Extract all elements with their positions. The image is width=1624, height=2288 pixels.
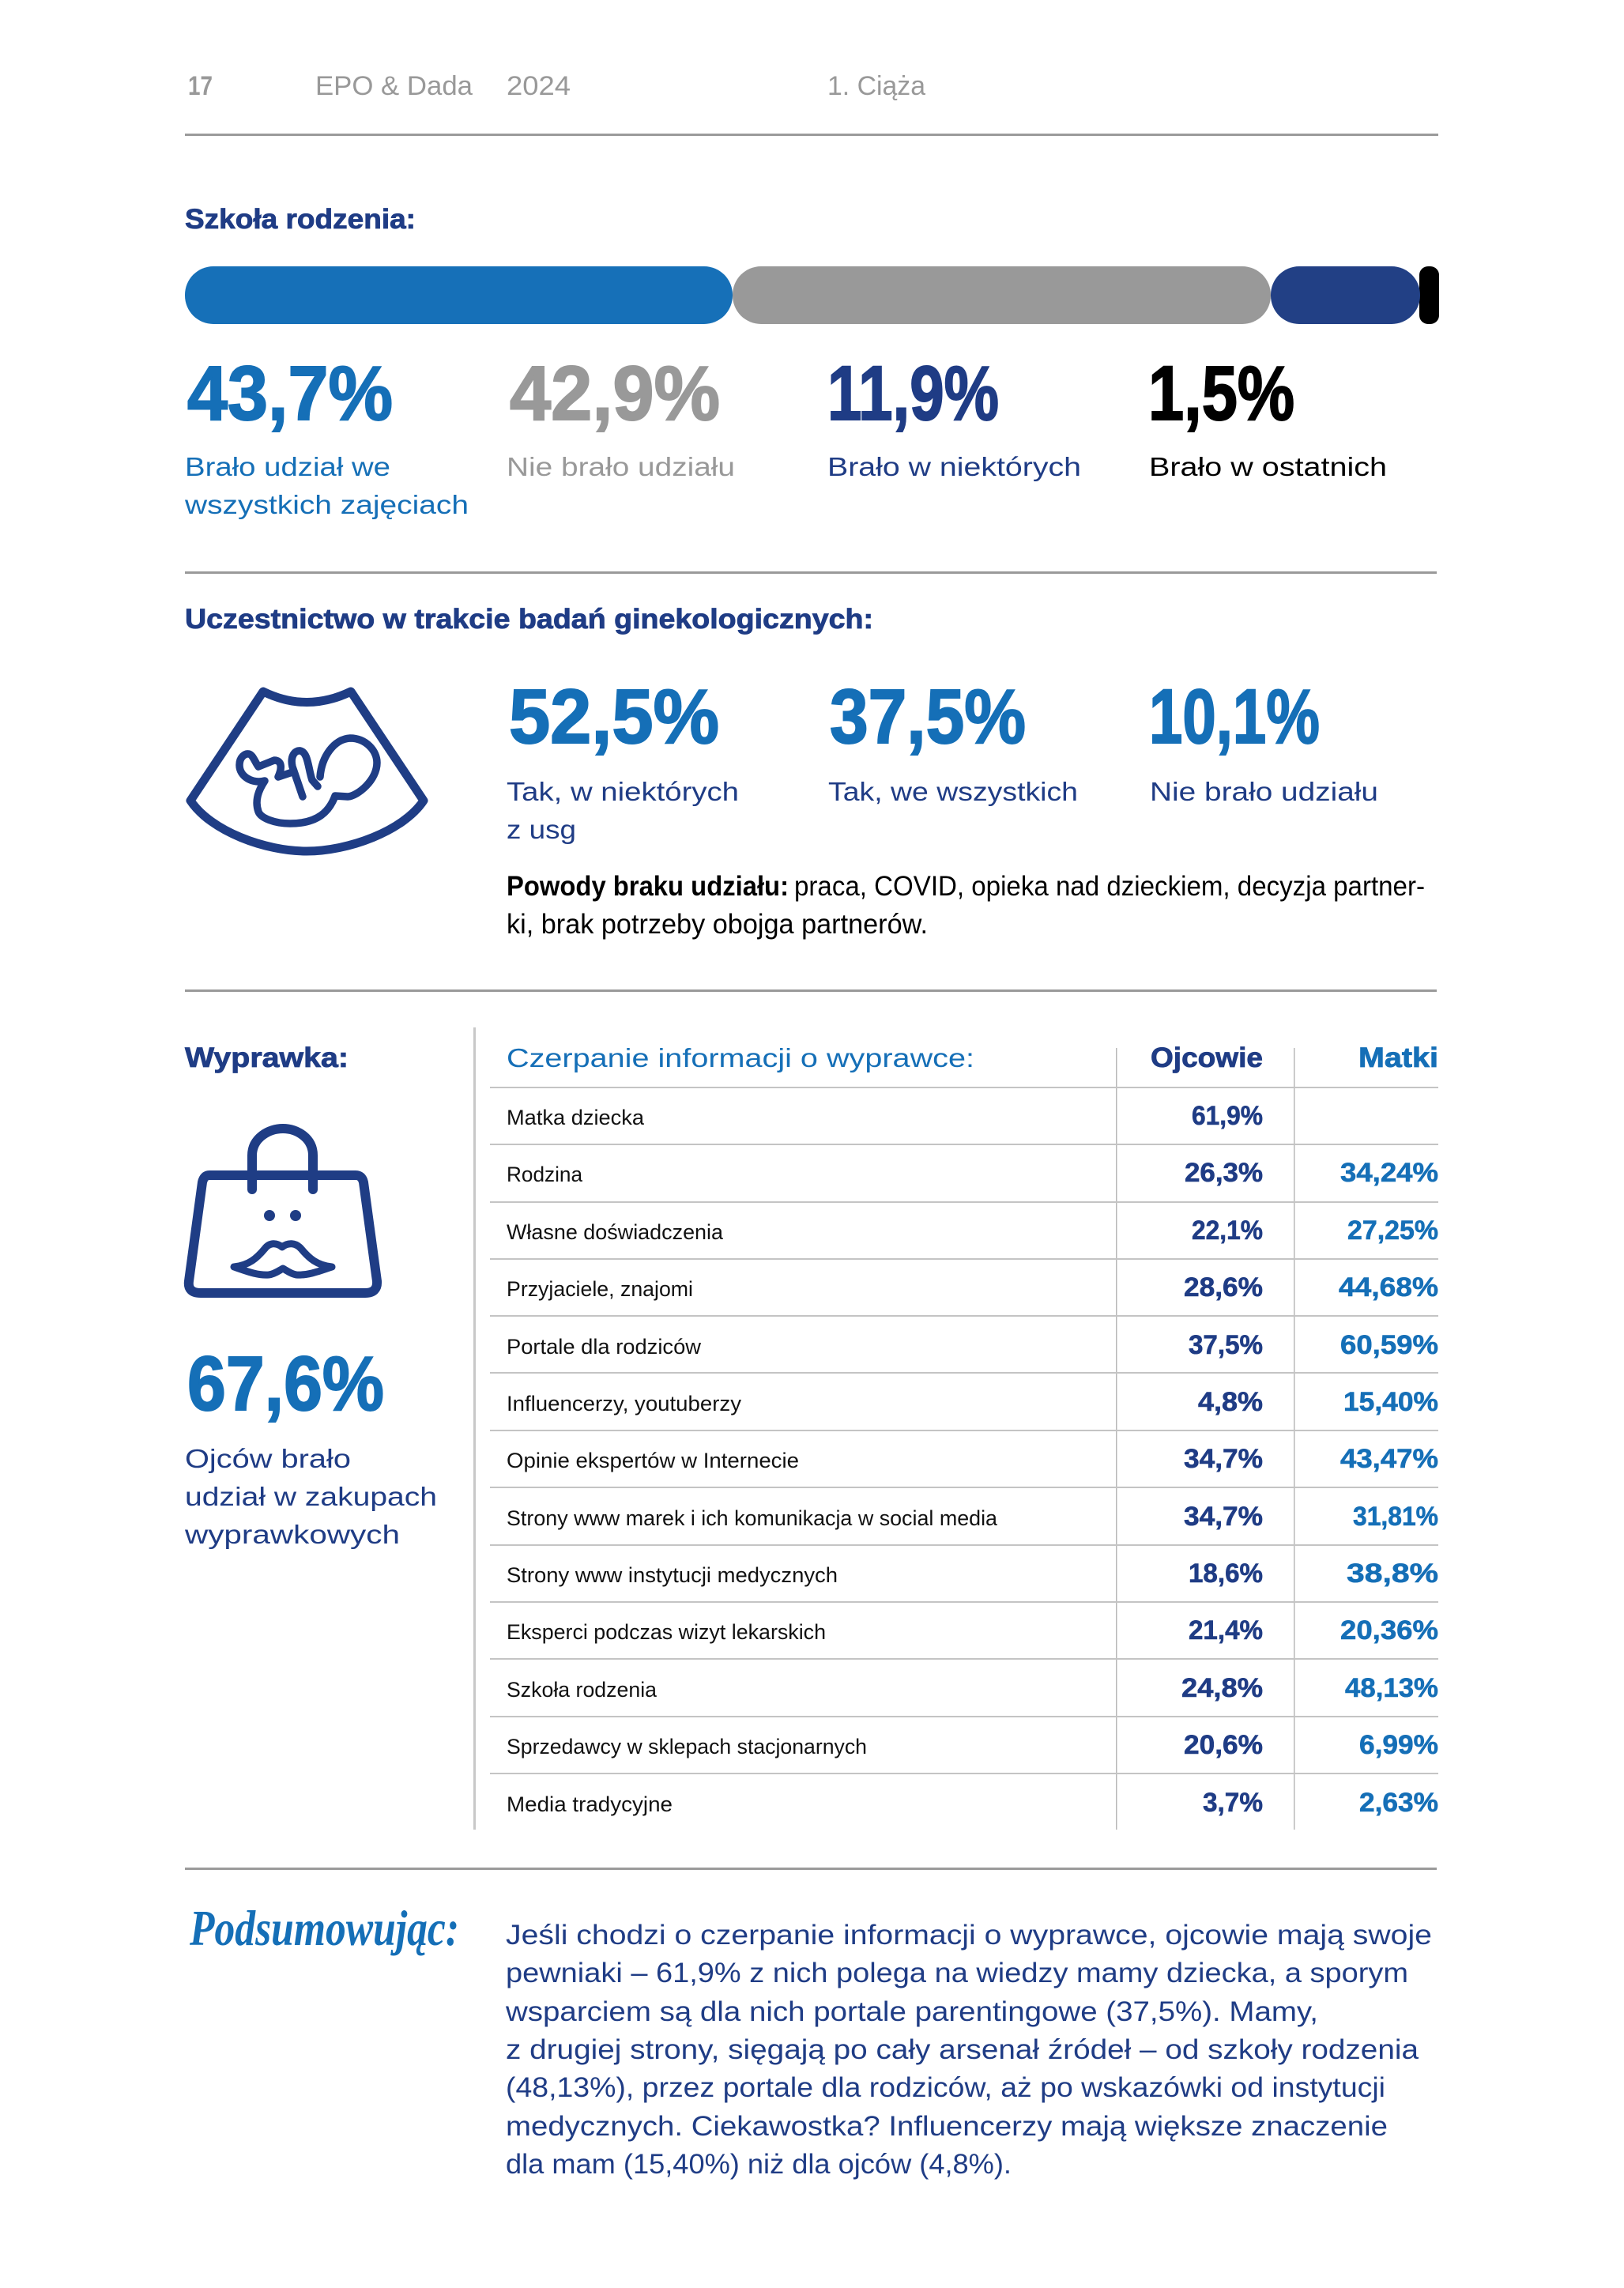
table rows: Opinie ekspertów w Internecie bbox=[507, 1449, 799, 1472]
table rows: 44,68% bbox=[1339, 1272, 1438, 1302]
panel: Wyprawka bbox=[184, 1027, 1438, 1830]
stat: 1,5%: Brało w ostatnich bbox=[1149, 452, 1387, 481]
text block: summary: dla mam (15,40%) niż dla ojców (4,8%). bbox=[506, 2149, 1012, 2180]
table rows: 60,59% bbox=[1340, 1330, 1438, 1360]
stat: 42,9% bbox=[507, 350, 735, 481]
stat: 1,5%: 1,5% bbox=[1148, 350, 1294, 436]
table header: Matki bbox=[1358, 1042, 1438, 1073]
panel: podsumowanie bbox=[189, 1900, 1432, 2180]
table rows: Media tradycyjne bbox=[507, 1792, 673, 1816]
stat: 43,7%: Brało udział we bbox=[185, 452, 390, 481]
stat: 67,6%: 67,6% bbox=[187, 1340, 384, 1427]
heading: Uczestnictwo: Uczestnictwo w trakcie badań ginekologicznych: bbox=[185, 604, 873, 635]
icon: ultrasound bbox=[190, 692, 424, 851]
stat: 67,6%: wyprawkowych bbox=[184, 1520, 400, 1549]
table rows: 28,6% bbox=[1184, 1272, 1263, 1302]
table rows: Strony www instytucji medycznych bbox=[507, 1563, 838, 1587]
stat: 42,9%: Nie brało udziału bbox=[507, 452, 735, 481]
text block: summary: pewniaki – 61,9% z nich polega na wiedzy mamy dziecka, a sporym bbox=[506, 1958, 1408, 1988]
table rows: 61,9% bbox=[1192, 1101, 1263, 1131]
stat: 43,7% bbox=[184, 350, 469, 519]
stat: 52,5%: z usg bbox=[507, 815, 576, 844]
table rows: 26,3% bbox=[1185, 1158, 1263, 1188]
stat: 10,1%: Nie brało udziału bbox=[1150, 777, 1378, 806]
text block: summary: z drugiej strony, sięgają po cały arsenał źródeł – od szkoły rodzenia bbox=[506, 2034, 1419, 2065]
table rows: Eksperci podczas wizyt lekarskich bbox=[507, 1620, 826, 1644]
page header: 1. Ciąża bbox=[827, 71, 925, 101]
table: źródła informacji bbox=[490, 1042, 1438, 1830]
table rows: 2,63% bbox=[1359, 1788, 1438, 1818]
page header: EPO & Dada bbox=[315, 71, 473, 101]
text block: summary bbox=[505, 1920, 1432, 2180]
table rows: Matka dziecka bbox=[507, 1106, 645, 1129]
panel: Szkoła rodzenia bbox=[184, 204, 1439, 519]
stat: 11,9% bbox=[827, 350, 1081, 481]
panel: badania ginekologiczne bbox=[185, 604, 1425, 940]
table rows: Sprzedawcy w sklepach stacjonarnych bbox=[507, 1735, 867, 1758]
table rows: Rodzina bbox=[507, 1163, 583, 1186]
stat: 42,9%: 42,9% bbox=[510, 350, 720, 436]
table rows: 37,5% bbox=[1189, 1330, 1263, 1360]
table rows: 48,13% bbox=[1345, 1673, 1438, 1703]
table rows: 27,25% bbox=[1347, 1216, 1438, 1246]
table rows: 34,7% bbox=[1184, 1502, 1263, 1532]
page header bbox=[185, 71, 1438, 136]
table rows: 15,40% bbox=[1343, 1387, 1438, 1417]
heading: Podsumowując: Podsumowując: bbox=[189, 1900, 459, 1956]
text block: summary: medycznych. Ciekawostka? Influencerzy mają większe znaczenie bbox=[506, 2111, 1388, 2142]
table rows: 20,6% bbox=[1184, 1730, 1263, 1760]
table rows: Portale dla rodziców bbox=[507, 1335, 702, 1359]
table rows: Szkoła rodzenia bbox=[507, 1678, 658, 1702]
table rows: Strony www marek i ich komunikacja w social media bbox=[507, 1506, 998, 1530]
stat: 52,5% bbox=[507, 673, 739, 844]
table rows: 22,1% bbox=[1192, 1216, 1263, 1246]
stat: 43,7%: wszystkich zajęciach bbox=[184, 490, 469, 519]
table rows: 31,81% bbox=[1353, 1502, 1438, 1532]
table rows: 3,7% bbox=[1203, 1788, 1263, 1818]
stat: 37,5%: 37,5% bbox=[830, 673, 1026, 760]
heading: Wyprawka: Wyprawka: bbox=[185, 1042, 349, 1073]
stat: 37,5% bbox=[828, 673, 1078, 806]
stacked bar bbox=[185, 266, 1439, 324]
table rows: 21,4% bbox=[1189, 1615, 1263, 1645]
table rows: Własne doświadczenia bbox=[507, 1220, 724, 1244]
table rows: Influencerzy, youtuberzy bbox=[507, 1392, 741, 1415]
table rows: 34,24% bbox=[1340, 1158, 1438, 1188]
stat: 67,6%: Ojców brało bbox=[185, 1444, 351, 1473]
table header: Czerpanie informacji o wyprawce: bbox=[507, 1043, 974, 1072]
table rows: 18,6% bbox=[1189, 1559, 1263, 1589]
stat: 10,1%: 10,1% bbox=[1149, 673, 1320, 760]
table header bbox=[507, 1042, 1438, 1073]
stat: 1,5% bbox=[1148, 350, 1387, 481]
page header: 2024 bbox=[507, 71, 571, 101]
stat: 11,9%: Brało w niektórych bbox=[827, 452, 1081, 481]
stat: 10,1% bbox=[1149, 673, 1378, 806]
table rows: 6,99% bbox=[1359, 1730, 1438, 1760]
stat: 67,6% bbox=[184, 1340, 437, 1549]
table rows bbox=[507, 1101, 1438, 1818]
table rows: 34,7% bbox=[1184, 1444, 1263, 1474]
text block: powody braku udziału: praca, COVID, opieka nad dzieckiem, decyzja partner- bbox=[794, 871, 1425, 902]
stat: 11,9%: 11,9% bbox=[827, 350, 999, 436]
table rows: 20,36% bbox=[1340, 1615, 1438, 1645]
table rows: 4,8% bbox=[1198, 1387, 1263, 1417]
stat: 67,6%: udział w zakupach bbox=[185, 1482, 437, 1511]
text block: powody braku udziału: ki, brak potrzeby obojga partnerów. bbox=[507, 909, 928, 940]
table header: Ojcowie bbox=[1151, 1042, 1263, 1073]
text block: summary: Jeśli chodzi o czerpanie informacji o wyprawce, ojcowie mają swoje bbox=[506, 1920, 1432, 1951]
stat: 52,5%: 52,5% bbox=[509, 673, 719, 760]
stat: 37,5%: Tak, we wszystkich bbox=[828, 777, 1078, 806]
table rows: Przyjaciele, znajomi bbox=[507, 1277, 693, 1301]
stat: 52,5%: Tak, w niektórych bbox=[507, 777, 739, 806]
text block: powody braku udziału: Powody braku udziału: bbox=[507, 871, 789, 902]
table rows: 43,47% bbox=[1340, 1444, 1438, 1474]
text block: summary: wsparciem są dla nich portale parentingowe (37,5%). Mamy, bbox=[505, 1996, 1318, 2027]
table rows: 38,8% bbox=[1347, 1559, 1438, 1589]
page header: 17 bbox=[188, 71, 213, 101]
icon: bag with moustache bbox=[189, 1129, 377, 1293]
stat: 43,7%: 43,7% bbox=[187, 350, 393, 436]
text block: summary: (48,13%), przez portale dla rodziców, aż po wskazówki od instytucji bbox=[506, 2072, 1385, 2103]
table rows: 24,8% bbox=[1181, 1673, 1263, 1703]
text block: powody braku udziału bbox=[507, 871, 1425, 940]
heading: Szkoła rodzenia: Szkoła rodzenia: bbox=[185, 204, 416, 235]
